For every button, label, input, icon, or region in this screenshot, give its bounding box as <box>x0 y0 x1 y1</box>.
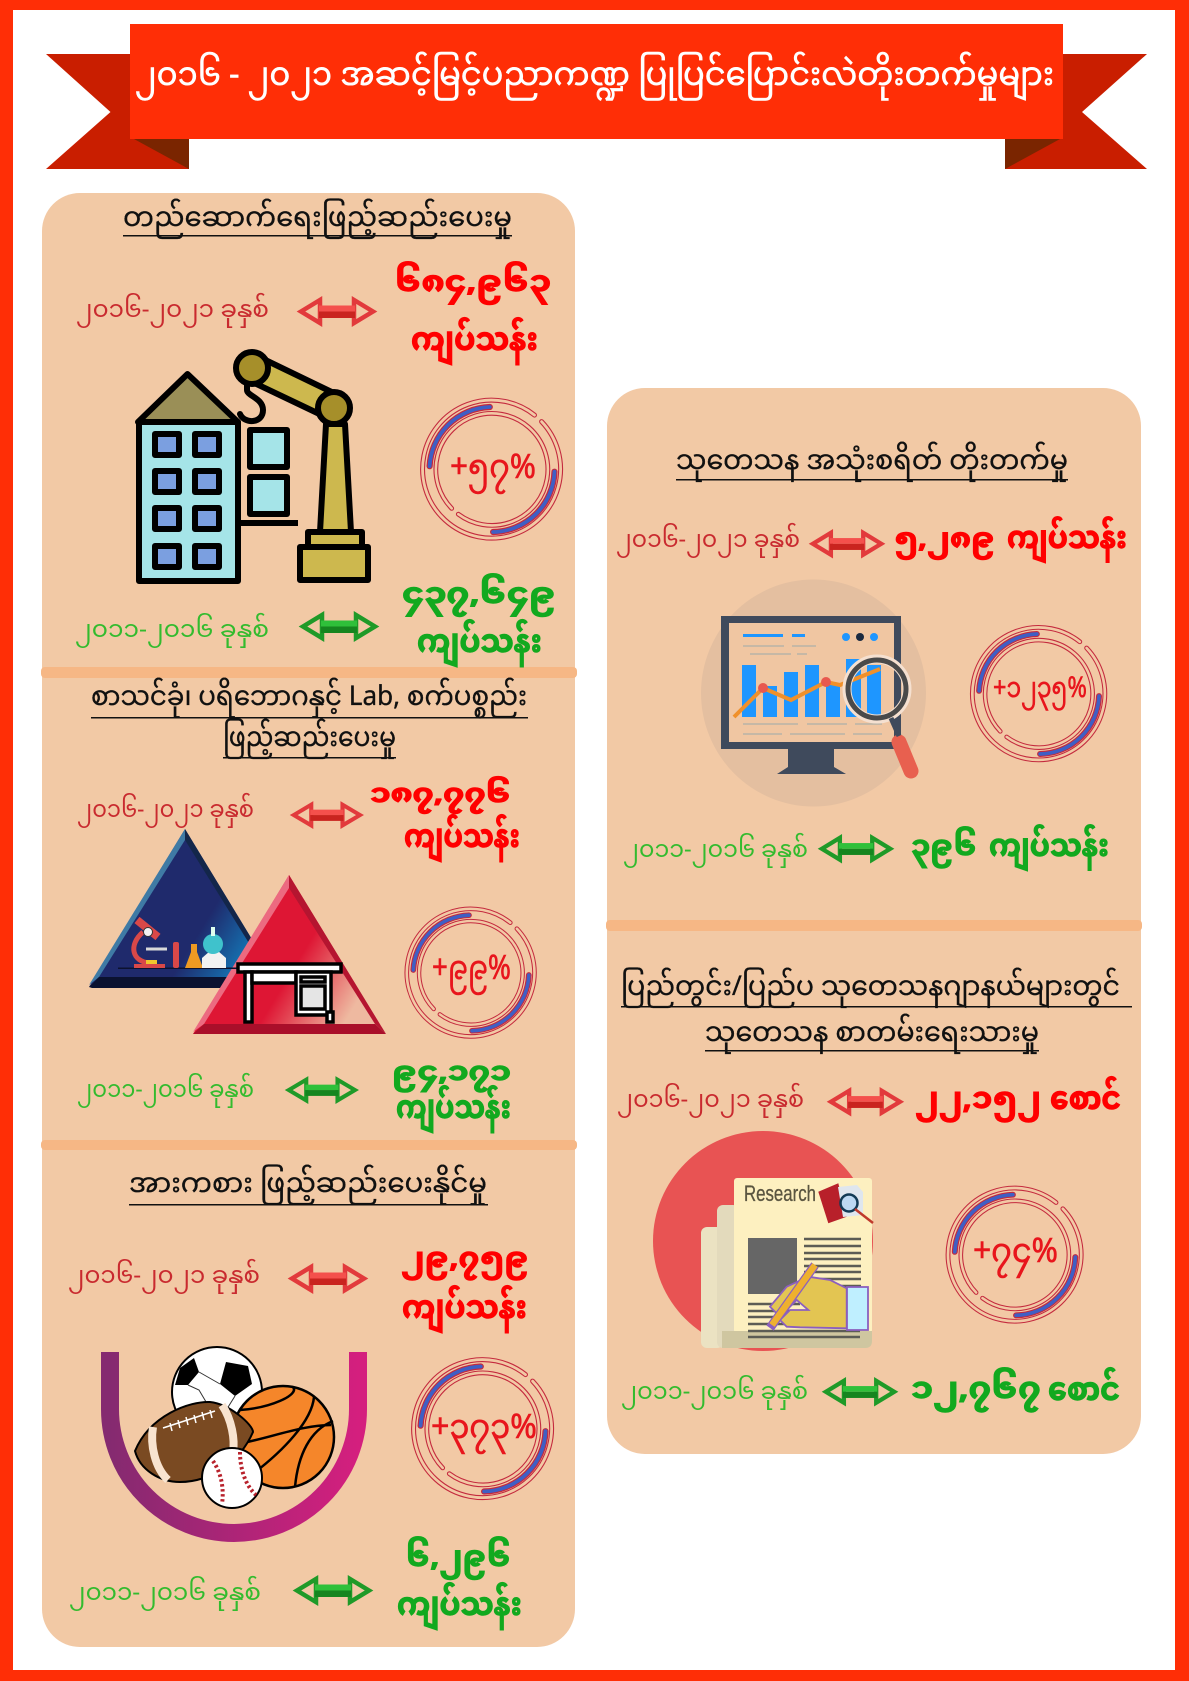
unit: red: ကျပ်သန်း <box>404 805 520 875</box>
2011-2016 label: ၂၀၁၁-၂၀၁၆ ခုနှစ် <box>75 605 269 658</box>
panel: sports <box>68 1157 552 1643</box>
value: 2011-2016: ၉၄,၁၇၁ <box>392 1047 511 1103</box>
heading: sports: အားကစား ဖြည့်ဆည်းပေးနိုင်မှု <box>129 1157 487 1216</box>
heading line two: ဖြည့်ဆည်းပေးမှု <box>223 711 396 770</box>
unit: green: ကျပ်သန်း <box>396 1076 511 1146</box>
value: 2016-2021: ၂၉,၇၅၉ <box>401 1231 529 1292</box>
panel: classroom and lab <box>77 670 534 1146</box>
2016-2021 label: ၂၀၁၆-၂၀၂၁ ခုနှစ် <box>617 1075 804 1128</box>
2016-2021 label: ၂၀၁၆-၂၀၂၁ ခုနှစ် <box>68 1251 260 1304</box>
2016-2021 label: ၂၀၁၆-၂၀၂၁ ခုနှစ် <box>76 285 269 338</box>
unit: red: ကျပ်သန်း <box>402 1276 527 1346</box>
unit: green: စောင် <box>1048 1358 1120 1428</box>
arrow: red <box>813 533 881 555</box>
arrow: red <box>301 300 373 323</box>
banner right ribbon tail <box>1005 54 1147 169</box>
banner left fold <box>134 139 189 169</box>
title text: ၂၀၁၆ - ၂၀၂၁ အဆင့်မြင့်ပညာကဏ္ဍ ပြုပြင်ပြောင်းလဲတိုးတက်မှုများ <box>135 42 1054 114</box>
round flask <box>202 927 226 968</box>
value: 2016-2021: ၆၈၄,၉၆၃ <box>395 253 551 316</box>
2016-2021 label: ၂၀၁၆-၂၀၂၁ ခုနှစ် <box>77 785 254 838</box>
percent: +99%: +၉၉% <box>432 935 511 1009</box>
unit: green: ကျပ်သန်း <box>417 610 542 680</box>
ring: +57% <box>423 400 561 538</box>
value: 2016-2021: ၂၂,၁၅၂ <box>915 1068 1041 1134</box>
icon: research newspaper <box>653 1131 873 1351</box>
arrow: green <box>822 838 890 860</box>
arrow: green <box>826 1381 894 1403</box>
banner body <box>130 24 1063 139</box>
arrow: green <box>297 1579 369 1602</box>
banner left ribbon tail <box>46 54 189 169</box>
2011-2016 label: ၂၀၁၁-၂၀၁၆ ခုနှစ် <box>69 1568 261 1621</box>
icon: monitor chart and magnifier <box>701 580 926 806</box>
ring: +74% <box>948 1188 1081 1321</box>
percent: +74%: +၇၄% <box>973 1218 1058 1292</box>
unit: green: ကျပ်သန်း <box>397 1573 522 1643</box>
value: 2011-2016: ၃၉၆ <box>911 819 977 880</box>
unit: red: ကျပ်သန်း <box>411 308 538 378</box>
heading: research papers: ပြည်တွင်း/ပြည်ပ သုတေသနဂျာနယ်များတွင် <box>621 960 1120 1019</box>
panel: research spending <box>616 434 1127 883</box>
ring: +373% <box>414 1360 552 1498</box>
test tube <box>173 942 179 968</box>
unit: red: စောင် <box>1050 1067 1121 1137</box>
icon: lab and desk triangles <box>89 829 386 1034</box>
value: 2016-2021: ၅,၂၈၉ <box>894 512 995 571</box>
value: 2011-2016: ၄၃၇,၆၄၉ <box>402 565 556 628</box>
heading: classroom: စာသင်ခုံ၊ ပရိဘောဂနှင့် Lab, စက်ပစ္စည်း <box>91 670 527 729</box>
soccer ball <box>172 1347 262 1437</box>
2011-2016 label: ၂၀၁၁-၂၀၁၆ ခုနှစ် <box>623 825 808 878</box>
2011-2016 label: ၂၀၁၁-၂၀၁၆ ခုနှစ် <box>77 1065 254 1118</box>
microscope <box>134 920 167 968</box>
heading line two: သုတေသန စာတမ်းရေးသားမှု <box>705 1006 1039 1065</box>
percent: +57%: +၅၇% <box>450 434 536 508</box>
icon: sports balls <box>110 1347 358 1533</box>
value: 2011-2016: ၆,၂၉၆ <box>406 1528 511 1591</box>
arrow: green <box>289 1080 355 1100</box>
unit: red: ကျပ်သန်း <box>1007 507 1127 575</box>
2016-2021 label: ၂၀၁၆-၂၀၂၁ ခုနှစ် <box>616 515 800 568</box>
title banner <box>46 24 1147 169</box>
arrow: red <box>831 1091 900 1113</box>
heading: construction: တည်ဆောက်ရေးဖြည့်ဆည်းပေးမှု <box>123 191 512 250</box>
desk <box>238 964 341 1022</box>
basketball <box>232 1386 334 1488</box>
heading: research spending: သုတေသန အသုံးစရိတ် တိုးတက်မှု <box>676 434 1068 493</box>
baseball <box>202 1448 262 1508</box>
right column card <box>607 388 1141 1454</box>
unit: green: ကျပ်သန်း <box>989 815 1109 883</box>
research label: Research <box>744 1181 816 1206</box>
flask <box>185 944 203 968</box>
arrow: green <box>303 615 375 638</box>
panel: research papers <box>617 960 1132 1428</box>
percent: +373%: +၃၇၃% <box>431 1394 537 1468</box>
percent: +1235%: +၁၂၃၅% <box>993 661 1087 722</box>
icon: building and crane <box>138 352 368 581</box>
small report icon <box>818 1183 873 1223</box>
arrow: red <box>294 805 360 825</box>
arrow: red <box>292 1267 364 1290</box>
2011-2016 label: ၂၀၁၁-၂၀၁၆ ခုနှစ် <box>621 1367 808 1420</box>
ring: +99% <box>407 909 534 1036</box>
value: 2016-2021: ၁၈၇,၇၇၆ <box>370 769 511 824</box>
panel: construction <box>75 191 561 680</box>
american football <box>135 1402 253 1482</box>
value: 2011-2016: ၁၂,၇၆၇ <box>911 1358 1041 1424</box>
ring: +1235% <box>972 627 1105 760</box>
left column card <box>42 193 575 1647</box>
banner right fold <box>1005 139 1060 169</box>
